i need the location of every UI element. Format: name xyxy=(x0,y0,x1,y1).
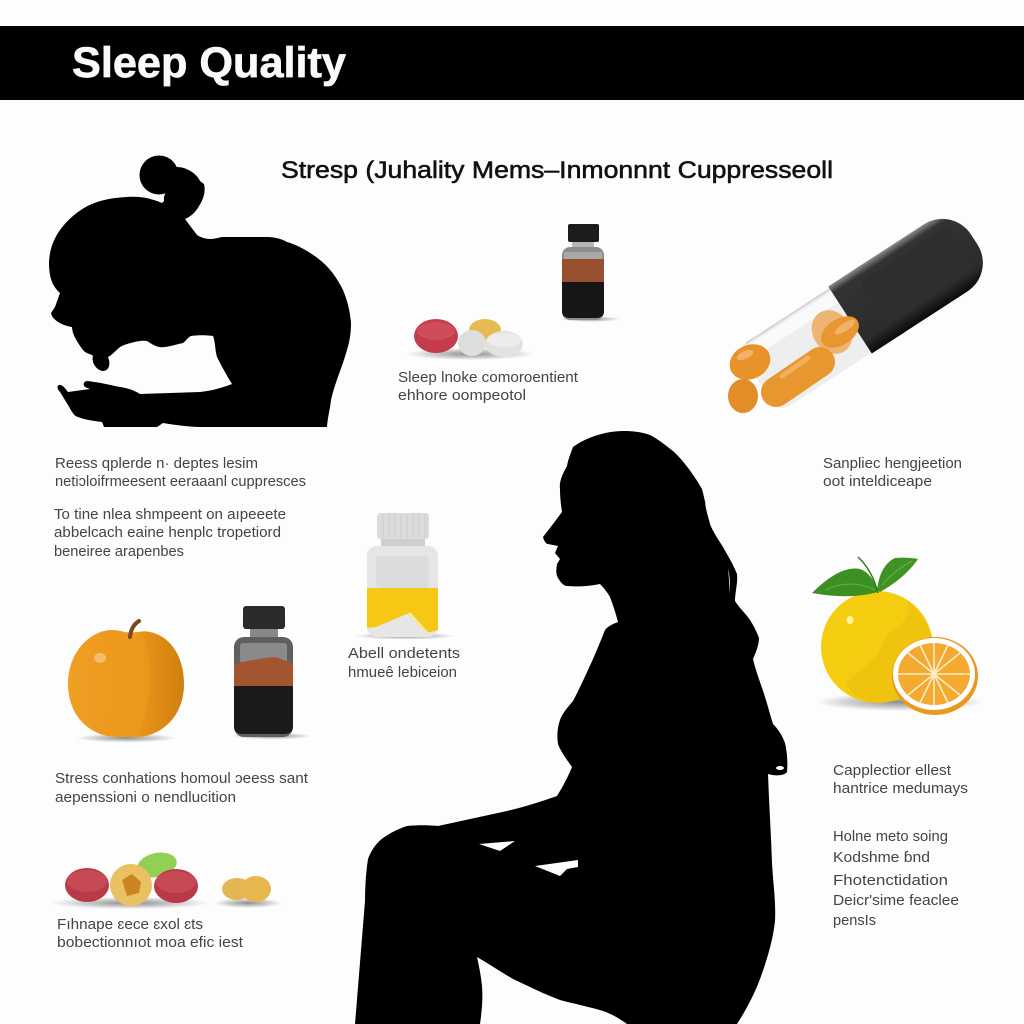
text: hormone list: Holne meto soing xyxy=(833,828,948,845)
text: bottom note xyxy=(57,916,244,951)
text: capillary note xyxy=(833,762,968,797)
text: bottom note: bobectionnıot moa efic iest xyxy=(57,934,244,951)
icon: orange fruit xyxy=(68,621,184,742)
text: appetite explanation: To tine nlea shmpeent on aıpeeete xyxy=(54,506,286,523)
icon: bottom pills and seeds xyxy=(50,849,282,909)
text: hormone list: Fhotenctidation xyxy=(833,872,948,889)
text: hormone list: Deicr'sime feaclee xyxy=(833,892,959,909)
text: appetite explanation: beneiree arapenbes xyxy=(54,543,184,560)
title: Sleep Quality xyxy=(72,39,346,87)
text: sleep component xyxy=(398,369,579,404)
silhouette: seated woman with long hair xyxy=(355,431,787,1024)
text: bottom note: Fıhnape ɛece ɛxol ɛts xyxy=(57,916,203,933)
subtitle heading: Stresp (Juhality Mems–Inmonnnt Cuppresseoll xyxy=(281,157,833,184)
leg gap highlights xyxy=(479,503,784,876)
text: label under white bottle: hmueê lebiceion xyxy=(348,664,457,681)
text: sleep component: Sleep lnoke comoroentient xyxy=(398,369,579,386)
text: sampling note: Sanpliec hengjeetion xyxy=(823,455,962,472)
text: hormone list xyxy=(833,828,959,929)
text: sampling note xyxy=(823,455,962,490)
text: hormone list: pensIs xyxy=(833,912,876,929)
text: label under white bottle: Abell ondetents xyxy=(348,645,460,662)
text: capillary note: Capplectior ellest xyxy=(833,762,952,779)
text: stress explanation: Reess qplerde n· deptes lesim xyxy=(55,455,258,472)
icon: small dark bottle xyxy=(560,224,620,322)
text: stress conditions: Stress conhations homoul ɔeess sant xyxy=(55,770,309,787)
text: appetite explanation: abbelcach eaine henplc tropetiord xyxy=(54,524,281,541)
silhouette: person bent forward xyxy=(49,156,351,427)
text: sampling note: oot inteldiceape xyxy=(823,473,932,490)
icon: lemon with orange slice xyxy=(812,557,984,715)
header band xyxy=(0,26,1024,100)
orange slice xyxy=(892,637,978,715)
text: appetite explanation xyxy=(54,506,286,560)
icon: pill group xyxy=(406,319,534,360)
text: hormone list: Kodshme ɓnd xyxy=(833,849,930,866)
icon: dark bottle with brown liquid xyxy=(232,606,312,740)
icon: white bottle with yellow liquid xyxy=(355,513,455,640)
text: capillary note: hantrice medumays xyxy=(833,780,968,797)
text: sleep component: ehhore oompeotol xyxy=(398,387,526,404)
text: stress conditions xyxy=(55,770,309,806)
text: stress conditions: aepenssioni o nendlucition xyxy=(55,789,236,806)
icon: large open capsule xyxy=(724,206,996,413)
text: stress explanation xyxy=(55,455,306,490)
text: label under white bottle xyxy=(348,645,460,681)
text: stress explanation: netiɔloifrmeesent eeraaanl cuppresces xyxy=(55,473,306,490)
